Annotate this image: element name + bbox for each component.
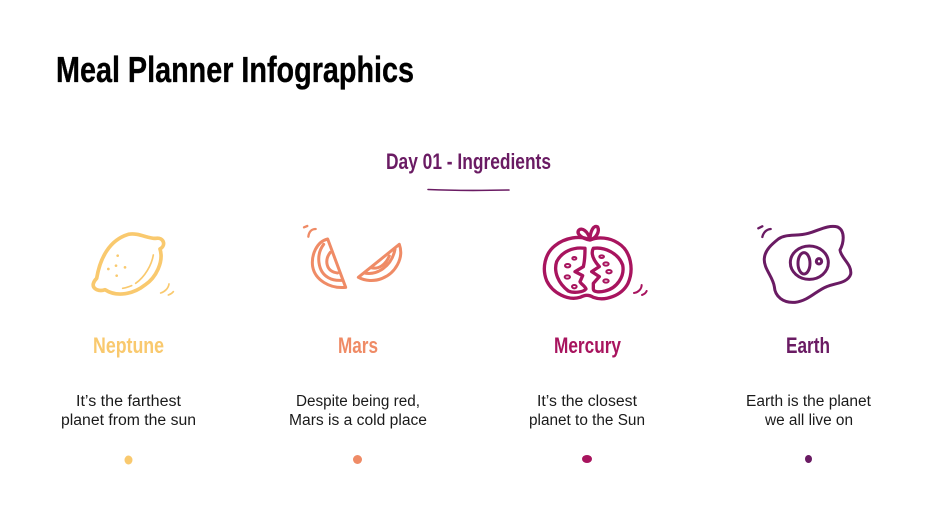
panel: Mars: [289, 226, 427, 464]
name: Mercury: Mercury: [554, 333, 622, 358]
subtitle: Day 01 - Ingredients: [386, 149, 551, 174]
description: Mercury: planet to the Sun: [529, 412, 645, 429]
dot: Mercury: [582, 455, 592, 463]
icon: lemon: [93, 234, 173, 295]
icon: tomato: [544, 226, 647, 299]
panel: Neptune: [61, 234, 196, 464]
panel: Earth: [746, 226, 872, 463]
icon: tomato wedges: [304, 226, 401, 288]
description: Mars: Mars is a cold place: [289, 412, 427, 429]
dot: Earth: [805, 455, 812, 463]
name: Mars: Mars: [338, 333, 378, 358]
description: Mercury: It’s the closest: [537, 393, 638, 410]
dot: Neptune: [124, 456, 132, 464]
description: Neptune: planet from the sun: [61, 412, 196, 429]
description: Mars: Despite being red,: [296, 393, 420, 410]
description: Earth: we all live on: [764, 412, 853, 429]
icon: fried egg: [758, 226, 851, 302]
underline: [428, 188, 509, 191]
panel: Mercury: [529, 226, 647, 463]
name: Neptune: Neptune: [93, 333, 164, 358]
name: Earth: Earth: [786, 333, 830, 358]
title: Meal Planner Infographics: [56, 49, 414, 90]
description: Earth: Earth is the planet: [746, 393, 872, 410]
dot: Mars: [353, 455, 362, 464]
description: Neptune: It’s the farthest: [76, 393, 182, 410]
